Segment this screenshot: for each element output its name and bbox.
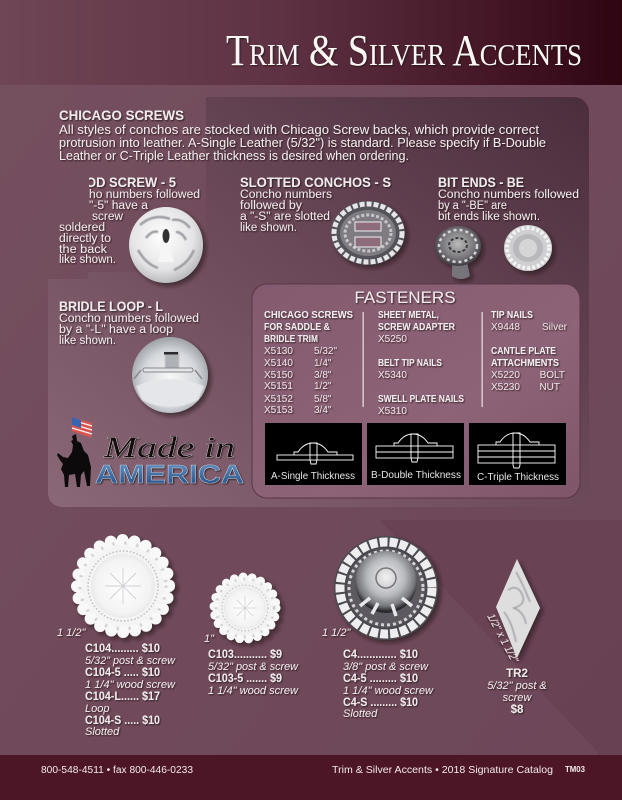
icon: bit end disc xyxy=(504,225,552,271)
column: tip nails and cantle: X5220 xyxy=(491,370,520,381)
text block: C4 prices: C4-5 ......... $10 xyxy=(343,673,418,685)
diagram: c-triple thickness xyxy=(469,423,566,485)
label: C103 size: 1" xyxy=(204,633,215,645)
text block: slotted conchos: followed by xyxy=(240,200,302,212)
text block: C103 prices: C103........... $9 xyxy=(208,649,282,661)
column: chicago screws list: X5153 xyxy=(264,405,293,416)
column: chicago screws list: X5152 xyxy=(264,394,293,405)
text block: wood screw: directly to xyxy=(59,233,111,245)
text block: C4 prices: Slotted xyxy=(343,708,378,720)
label: C104 size: 1 1/2" xyxy=(57,627,86,639)
column: tip nails and cantle: X5230 xyxy=(491,382,520,393)
column: tip nails and cantle: TIP NAILS xyxy=(491,310,533,321)
icon: wood screw concho back xyxy=(129,207,203,283)
panel: fasteners xyxy=(252,284,580,498)
text block: slotted conchos: Concho numbers xyxy=(240,189,332,201)
column: chicago screws list: X5151 xyxy=(264,381,293,392)
column: chicago screws list: X5140 xyxy=(264,358,293,369)
column: chicago screws list: 5/8" xyxy=(314,394,332,405)
product: C4 concho xyxy=(334,536,438,640)
text block: TR2 price xyxy=(487,668,547,716)
text block: C104 prices: C104-L...... $17 xyxy=(85,691,160,703)
text block: C4 prices: 1 1/4" wood screw xyxy=(343,685,434,697)
text block: C104 prices: C104......... $10 xyxy=(85,643,160,655)
text block: wood screw: ho numbers followed xyxy=(89,189,200,201)
text block: wood screw: "-5" have a xyxy=(89,200,149,212)
text block: C4 prices: C4............. $10 xyxy=(343,649,418,661)
column: tip nails and cantle xyxy=(491,310,568,393)
column: tip nails and cantle: CANTLE PLATE xyxy=(491,346,556,357)
diagram: a-single thickness xyxy=(265,423,362,485)
heading: fasteners: FASTENERS xyxy=(354,288,456,307)
column: chicago screws list: BRIDLE TRIM xyxy=(264,334,318,345)
text block: slotted conchos: a "-S" are slotted xyxy=(240,211,330,223)
text block: C4 prices: 3/8" post & screw xyxy=(343,661,429,673)
column: nails list: X5340 xyxy=(378,370,407,381)
column: chicago screws list: CHICAGO SCREWS xyxy=(264,310,353,321)
text block: bit ends: bit ends like shown. xyxy=(438,211,540,223)
column: chicago screws list: 5/32" xyxy=(314,346,337,357)
text block: C104 prices: Slotted xyxy=(85,726,120,738)
text block: C103 prices: 5/32" post & screw xyxy=(208,661,299,673)
text block: C103 prices: 1 1/4" wood screw xyxy=(208,685,299,697)
text block: chicago screws intro xyxy=(59,107,546,163)
column: tip nails and cantle: BOLT xyxy=(540,370,565,381)
text block: wood screw: like shown. xyxy=(59,254,116,266)
footer: page code: TM03 xyxy=(565,764,585,774)
text block: C104 prices: 1 1/4" wood screw xyxy=(85,679,176,691)
text block: C104 prices: Loop xyxy=(85,703,109,715)
text block: bit ends: Concho numbers followed xyxy=(438,189,579,201)
column: nails list: X5310 xyxy=(378,406,407,417)
logo: made in america xyxy=(57,417,244,489)
column: chicago screws list: FOR SADDLE & xyxy=(264,322,330,333)
text block: chicago screws intro: CHICAGO SCREWS xyxy=(59,107,184,123)
text block: bit ends xyxy=(438,174,579,223)
column: nails list: BELT TIP NAILS xyxy=(378,358,442,369)
text block: chicago screws intro: All styles of conchos are stocked with Chicago Screw backs, which provide correct xyxy=(59,123,540,137)
icon: american flag xyxy=(72,417,92,438)
column: chicago screws list: 1/2" xyxy=(314,381,332,392)
diagram: b-double thickness xyxy=(367,423,464,485)
footer band xyxy=(0,755,622,800)
column: nails list xyxy=(378,310,464,417)
text block: C4 prices: C4-S ......... $10 xyxy=(343,697,418,709)
text block: slotted conchos: like shown. xyxy=(240,222,297,234)
column: tip nails and cantle: Silver xyxy=(542,322,568,333)
product: C103 concho xyxy=(213,576,277,640)
icon: horse and rider xyxy=(57,434,91,487)
text block: C104 prices: C104-S ..... $10 xyxy=(85,715,160,727)
icon: bit end knob xyxy=(435,226,481,279)
text block: TR2 price: screw xyxy=(503,692,532,704)
diagonal dark band xyxy=(380,520,622,755)
text block: bit ends: BIT ENDS - BE xyxy=(438,174,524,190)
text block: slotted conchos: SLOTTED CONCHOS - S xyxy=(240,174,391,190)
diagram: b-double thickness: B-Double Thickness xyxy=(371,470,461,481)
column: chicago screws list xyxy=(264,310,353,416)
text: america: AMERICA xyxy=(95,459,244,489)
text block: bridle loop: Concho numbers followed xyxy=(59,313,199,325)
column: nails list: SWELL PLATE NAILS xyxy=(378,394,464,405)
icon: bridle loop concho xyxy=(132,337,208,413)
text block: C104 prices xyxy=(85,643,176,738)
text block: bridle loop: by a "-L" have a loop xyxy=(59,324,173,336)
text block: wood screw: the back xyxy=(59,244,107,256)
product: C104 concho xyxy=(76,539,170,633)
diagram: c-triple thickness: C-Triple Thickness xyxy=(477,472,559,483)
header band xyxy=(0,0,622,85)
text block: wood screw: OD SCREW - 5 xyxy=(86,174,176,190)
text block: C103 prices: C103-5 ....... $9 xyxy=(208,673,282,685)
label: TR2 size: 1/2" x 1 1/2" xyxy=(484,612,521,666)
column: chicago screws list: 1/4" xyxy=(314,358,332,369)
text block: wood screw: soldered xyxy=(59,222,105,234)
text block: TR2 price: TR2 xyxy=(506,668,528,680)
column: chicago screws list: X5150 xyxy=(264,370,293,381)
title: TRIM & SILVER ACCENTS xyxy=(226,26,582,75)
column: tip nails and cantle: NUT xyxy=(539,382,560,393)
footer: catalog name: Trim & Silver Accents • 2018 Signature Catalog xyxy=(332,764,553,776)
column: chicago screws list: 3/8" xyxy=(314,370,332,381)
text block: C104 prices: C104-5 ..... $10 xyxy=(85,667,160,679)
column: nails list: SHEET METAL, xyxy=(378,310,439,321)
text block: TR2 price: 5/32" post & xyxy=(487,680,547,692)
column: nails list: SCREW ADAPTER xyxy=(378,322,456,333)
column: chicago screws list: X5130 xyxy=(264,346,293,357)
text: made in: Made in xyxy=(103,431,235,464)
column: nails list: X5250 xyxy=(378,334,407,345)
panel: chicago screws backdrop xyxy=(48,97,589,507)
column: chicago screws list: 3/4" xyxy=(314,405,332,416)
footer: phone: 800-548-4511 • fax 800-446-0233 xyxy=(41,765,193,776)
text block: bit ends: by a "-BE" are xyxy=(438,200,507,212)
text block: C4 prices xyxy=(343,649,434,720)
label: C4 size: 1 1/2" xyxy=(322,627,351,639)
column: tip nails and cantle: X9448 xyxy=(491,322,520,333)
product: TR2 diamond concho xyxy=(496,559,540,658)
text block: TR2 price: $8 xyxy=(511,704,524,716)
text block: bridle loop: BRIDLE LOOP - L xyxy=(59,298,163,314)
text block: C103 prices xyxy=(208,649,299,697)
text block: chicago screws intro: protrusion into leather. A-Single Leather (5/32") is standard. Please specify if B-Double xyxy=(59,136,546,150)
text block: wood screw xyxy=(59,174,200,266)
text block: bridle loop: like shown. xyxy=(59,335,116,347)
diagram: a-single thickness: A-Single Thickness xyxy=(271,471,355,482)
icon: slotted concho xyxy=(331,201,405,265)
column: tip nails and cantle: ATTACHMENTS xyxy=(491,358,559,369)
text block: chicago screws intro: Leather or C-Triple Leather thickness is desired when ordering. xyxy=(59,149,409,163)
text block: bridle loop xyxy=(59,298,199,347)
text block: C104 prices: 5/32" post & screw xyxy=(85,655,176,667)
text block: wood screw: screw xyxy=(92,211,124,223)
text block: slotted conchos xyxy=(240,174,391,234)
